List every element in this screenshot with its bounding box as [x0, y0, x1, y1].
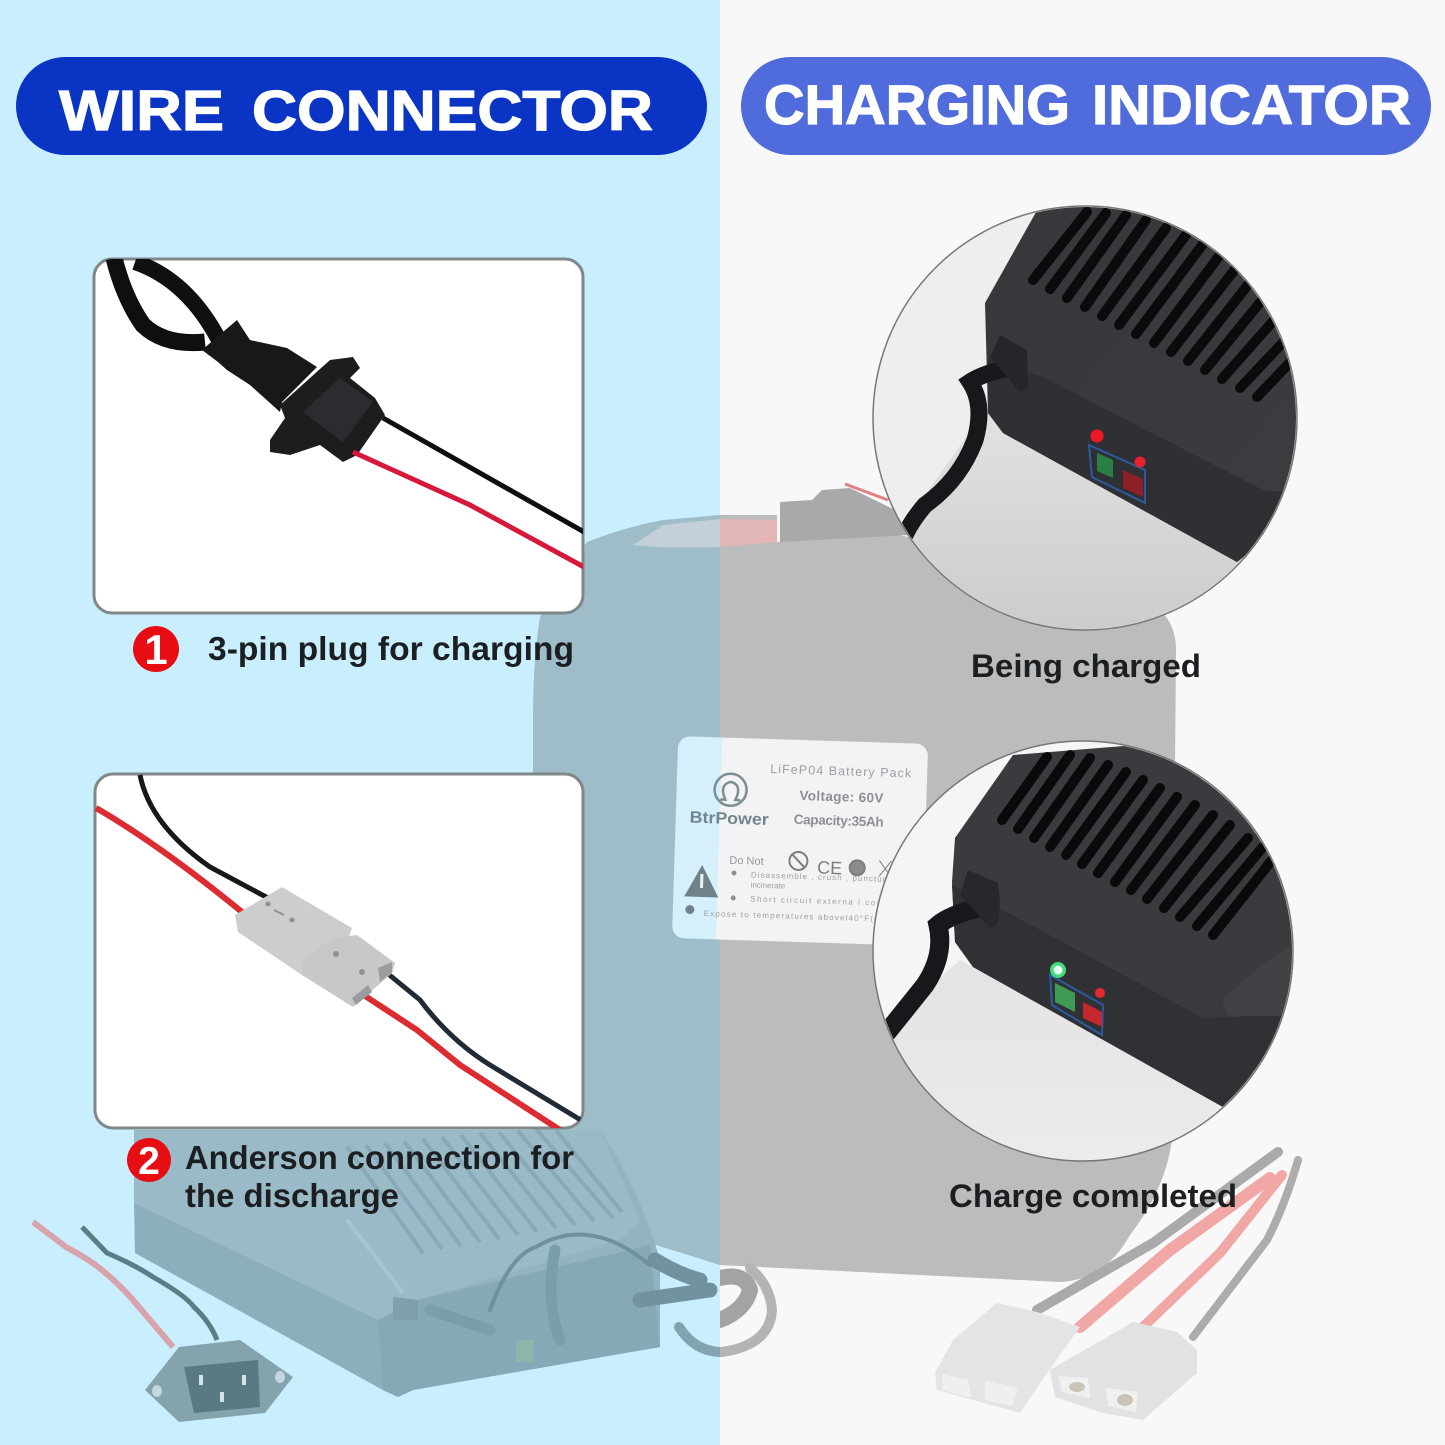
plug photo	[114, 258, 584, 567]
charger vents	[347, 1130, 622, 1253]
ghost charger cables	[430, 1235, 772, 1352]
caption: being charged: Being charged	[971, 648, 1201, 684]
label card square edge	[716, 738, 737, 940]
brand name: BtrPower	[689, 809, 770, 829]
cable	[905, 368, 1012, 535]
red label	[1083, 1002, 1102, 1027]
vent slots	[1033, 212, 1340, 397]
compliance icons	[789, 852, 892, 877]
circle background	[873, 741, 1293, 1161]
black wire	[82, 1227, 217, 1340]
red led left	[1090, 430, 1104, 442]
ghost Anderson connectors	[935, 1152, 1298, 1420]
icon: warning triangle	[684, 864, 719, 897]
cable loop inner	[135, 262, 220, 342]
background: left blue half	[0, 0, 720, 1445]
connector openings	[352, 962, 392, 1005]
plug body	[202, 320, 317, 412]
connector right contacts	[1069, 1382, 1133, 1406]
cable knot	[640, 1260, 710, 1300]
charger top lid	[134, 1130, 640, 1320]
heading text: CONNECTOR	[252, 79, 653, 143]
badge number: 1	[144, 626, 168, 673]
pill	[741, 57, 1431, 155]
caption: 3-pin plug: 3-pin plug for charging	[208, 630, 574, 667]
battery body, blue side	[533, 515, 720, 1265]
caption: Anderson connection	[185, 1139, 574, 1214]
indicator circle: charge completed	[870, 730, 1320, 1170]
front cable bundle	[490, 1235, 650, 1310]
tabletop	[870, 960, 1290, 1170]
green label	[1097, 453, 1113, 478]
logo	[714, 773, 747, 806]
connector left	[935, 1303, 1080, 1413]
grey and red wires	[1037, 1152, 1298, 1337]
lower red wire	[364, 994, 562, 1128]
inner cable	[430, 1250, 560, 1340]
charger lower face	[952, 885, 1300, 1107]
battery top slot, blue side	[633, 519, 720, 548]
ghost inlet plug	[33, 1222, 293, 1422]
battery top slot, grey side	[720, 519, 777, 547]
warning 1 cont.: incinerate	[750, 880, 786, 891]
charger corner block	[393, 1297, 418, 1320]
label card, white side	[719, 738, 928, 946]
red wire	[353, 452, 584, 567]
warning 1: Disassemble , crush , puncture	[751, 870, 892, 884]
green label	[1055, 983, 1075, 1012]
flange holes	[152, 1371, 285, 1397]
battery body, grey side	[700, 515, 1176, 1282]
panel frame	[94, 259, 583, 613]
voltage: Voltage: 60V	[799, 788, 884, 806]
heading text: INDICATOR	[1092, 73, 1411, 136]
plug body highlight	[303, 378, 373, 442]
background: right light half	[720, 0, 1445, 1445]
circle background	[873, 206, 1297, 630]
red label	[1123, 470, 1143, 497]
socket pins	[199, 1375, 246, 1402]
strain relief	[960, 870, 1000, 928]
capacity: Capacity:35Ah	[793, 812, 884, 830]
charger left face	[134, 1203, 383, 1390]
charger body	[952, 730, 1320, 1107]
caption line 1: Anderson connection for	[185, 1139, 574, 1176]
green led	[1050, 962, 1066, 978]
warning 2: Short circuit externa l cont	[750, 894, 886, 908]
plug flange	[145, 1340, 293, 1422]
red wire	[33, 1222, 173, 1347]
lower black wire	[387, 973, 584, 1122]
cable	[885, 908, 978, 1035]
plug socket	[184, 1360, 260, 1413]
product name: LiFeP04 Battery Pack	[770, 762, 912, 780]
ring, blue side	[674, 1322, 720, 1357]
caption: charge completed: Charge completed	[949, 1178, 1237, 1214]
panel frame	[95, 774, 583, 1128]
charger lower face	[988, 358, 1283, 562]
panel: 3-pin plug photo	[94, 258, 584, 613]
heading: charging indicator	[741, 57, 1431, 155]
indicator panel	[1050, 975, 1103, 1035]
connector right openings	[1058, 1376, 1138, 1412]
heading text: CHARGING	[764, 73, 1070, 136]
badge: 1	[133, 626, 179, 673]
dark knot grey side	[720, 1276, 750, 1320]
red led	[1095, 988, 1105, 998]
charger front face	[378, 1245, 660, 1397]
plug flange	[270, 357, 385, 462]
vent slots	[1002, 755, 1272, 935]
strain relief	[990, 335, 1028, 392]
battery terminal wire	[845, 484, 888, 500]
ghost battery label	[672, 736, 928, 946]
icon: warning mark	[700, 874, 703, 888]
badge number: 2	[138, 1140, 160, 1183]
indicator panel	[1089, 445, 1145, 503]
warning 3: Expose to temperatures abovel40°F(6	[704, 909, 879, 924]
pill	[16, 57, 707, 155]
badge circle	[133, 626, 179, 672]
connector left openings	[942, 1374, 1018, 1406]
lower left grey	[870, 480, 930, 640]
upper black wire	[140, 775, 268, 898]
heading text: WIRE	[59, 79, 224, 143]
CE mark: CE	[817, 858, 843, 878]
red led right	[1134, 456, 1146, 468]
caption line 2: the discharge	[185, 1177, 399, 1214]
green led core	[1054, 966, 1062, 974]
ring, grey side	[720, 1266, 777, 1357]
label card, blue side	[672, 736, 722, 940]
connector half two	[302, 935, 395, 1007]
upper red wire	[96, 808, 242, 912]
connector half one	[235, 887, 352, 975]
indicator circle: being charged	[872, 205, 1298, 631]
heading: wire connector	[16, 57, 707, 155]
do not: Do Not	[729, 855, 764, 868]
connector photo	[96, 775, 584, 1130]
lid corner bevel	[1222, 945, 1292, 1016]
ghost charger	[134, 1130, 660, 1397]
cable loop outer	[114, 258, 205, 343]
charger body	[985, 207, 1296, 562]
charger base shape	[134, 1130, 660, 1397]
badge: 2	[127, 1138, 171, 1183]
badge circle	[127, 1138, 171, 1182]
panel: Anderson connection photo	[95, 774, 584, 1130]
ghost battery pack	[533, 484, 1176, 1282]
black wire	[383, 418, 584, 532]
charger green lamp	[516, 1340, 534, 1362]
bullets	[685, 869, 737, 915]
battery terminal	[780, 488, 910, 542]
tabletop	[912, 412, 1244, 629]
connector detail	[266, 902, 365, 975]
connector right	[1050, 1322, 1197, 1420]
charger lid edge	[347, 1220, 403, 1293]
